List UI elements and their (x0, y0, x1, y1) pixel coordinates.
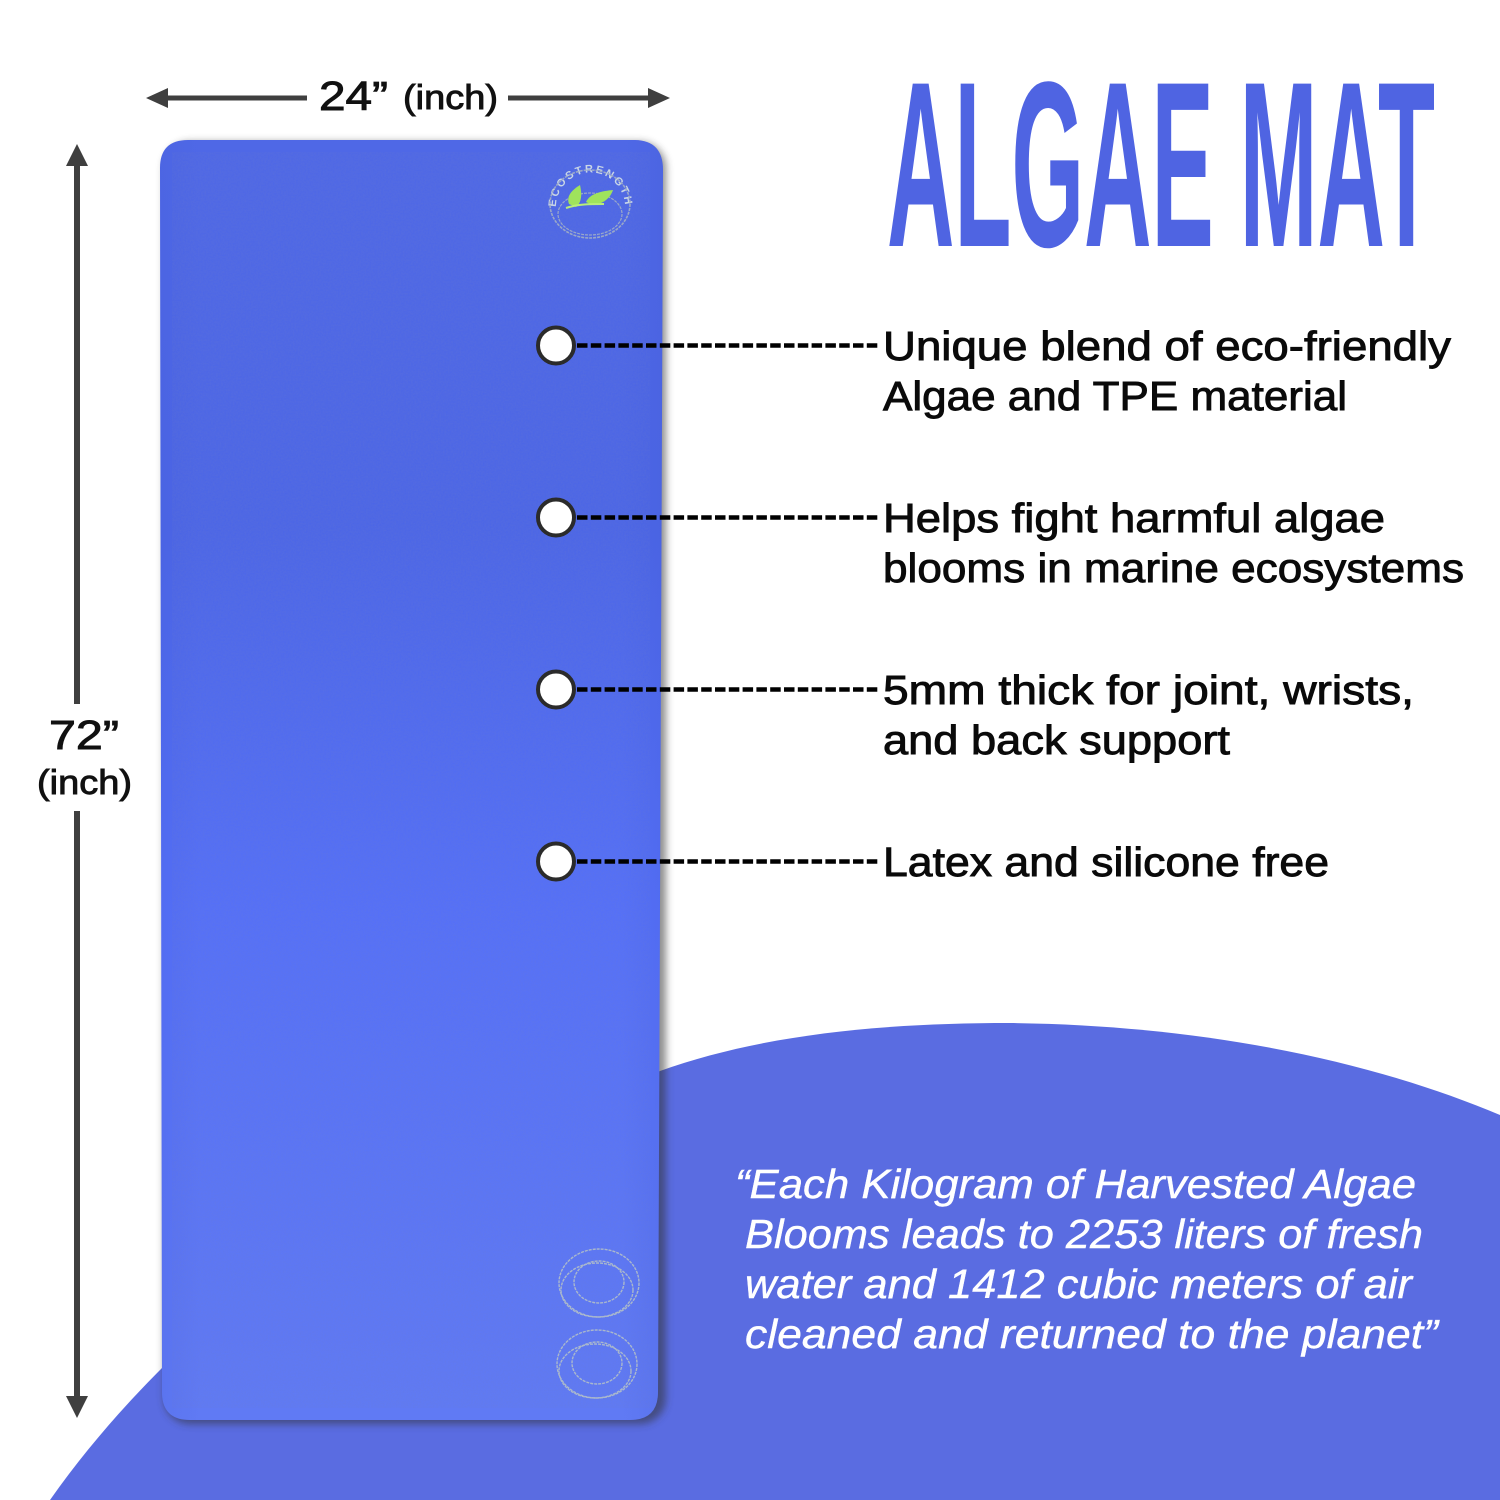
callout 1 (538, 323, 1452, 419)
width unit: (inch) (403, 79, 498, 117)
callout 3: 5mm thick for joint, wrists, (883, 667, 1414, 713)
height label: 72” (49, 712, 119, 758)
quote: cleaned and returned to the planet” (745, 1311, 1441, 1357)
quote: water and 1412 cubic meters of air (745, 1261, 1414, 1307)
bottom stamps (557, 1249, 639, 1398)
height dimension: 72 inch (37, 144, 132, 1418)
callout 2: Helps fight harmful algae (883, 495, 1385, 541)
logo: Ecostrength: ECOSTRENGTH (548, 164, 632, 206)
yoga mat (158, 136, 672, 1429)
quote: “Each Kilogram of Harvested Algae (735, 1161, 1416, 1207)
callout 2 (538, 495, 1464, 591)
callout 3: and back support (883, 717, 1231, 763)
quote (735, 1161, 1441, 1357)
top arrow (66, 144, 88, 704)
callout 1: Algae and TPE material (883, 373, 1347, 419)
mat shadow (164, 142, 666, 1424)
callout 1: Unique blend of eco-friendly (883, 323, 1452, 369)
mat body (160, 140, 663, 1420)
callout 4: Latex and silicone free (883, 839, 1329, 885)
callout 2: blooms in marine ecosystems (883, 545, 1464, 591)
logo: Ecostrength (548, 164, 632, 239)
width dimension: 24 inch (146, 73, 670, 119)
quote: Blooms leads to 2253 liters of fresh (745, 1211, 1423, 1257)
curved blue background panel (50, 1023, 1500, 1500)
mat side shading (160, 140, 663, 1420)
left arrow (146, 88, 307, 108)
right arrow (508, 88, 670, 108)
height unit: (inch) (37, 764, 132, 802)
width label: 24” (319, 73, 388, 119)
mat texture (172, 152, 650, 1408)
callout 3 (538, 667, 1414, 763)
bottom arrow (66, 811, 88, 1418)
callout 4 (538, 839, 1329, 885)
